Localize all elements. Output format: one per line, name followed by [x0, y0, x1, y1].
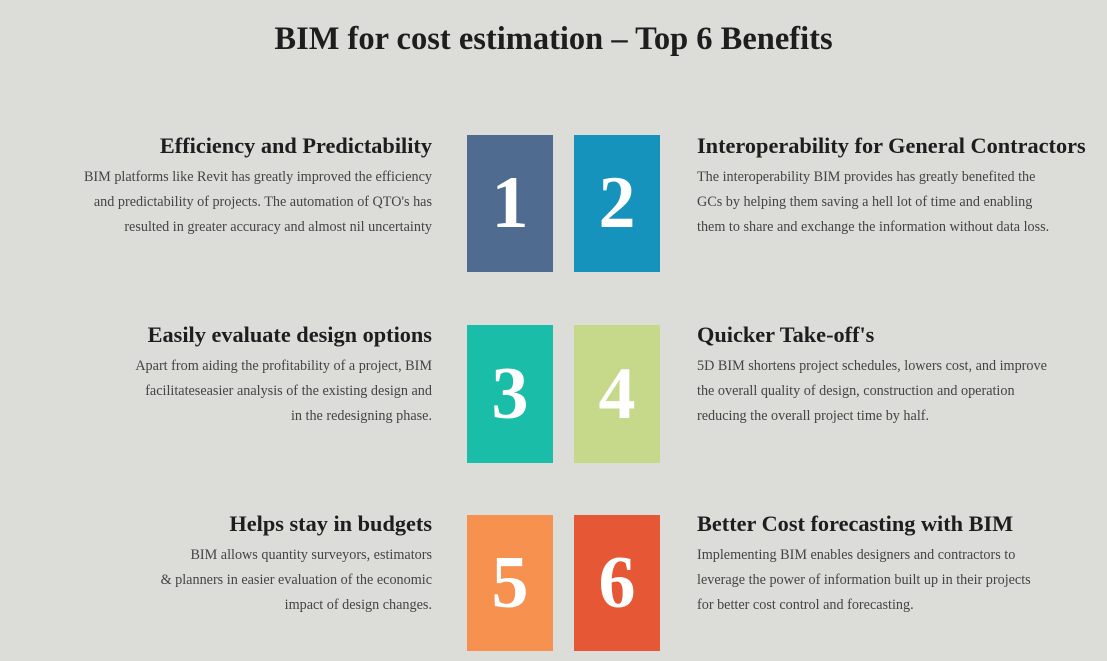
text 6: leverage the power of information built up in their projects — [697, 572, 1031, 588]
text 4: the overall quality of design, construction and operation — [697, 383, 1015, 399]
box 1: 1 — [492, 162, 528, 244]
box 4 — [574, 325, 660, 463]
text 2: Interoperability for General Contractors — [697, 133, 1086, 158]
text 3 — [135, 322, 432, 424]
text 1: and predictability of projects. The automation of QTO's has — [94, 194, 432, 210]
text 2 — [697, 133, 1086, 235]
title: BIM for cost estimation – Top 6 Benefits — [274, 21, 833, 57]
text 6: for better cost control and forecasting. — [697, 597, 914, 613]
text 1: resulted in greater accuracy and almost nil uncertainty — [124, 219, 432, 235]
box 2 — [574, 135, 660, 272]
text 3: Apart from aiding the profitability of a project, BIM — [135, 358, 432, 374]
text 5: Helps stay in budgets — [229, 511, 432, 536]
text 1: Efficiency and Predictability — [160, 133, 432, 158]
text 5: impact of design changes. — [285, 597, 432, 613]
text 6: Implementing BIM enables designers and contractors to — [697, 547, 1015, 563]
box 5: 5 — [492, 542, 528, 624]
text 2: them to share and exchange the information without data loss. — [697, 219, 1049, 235]
box 1 — [467, 135, 553, 272]
box 6 — [574, 515, 660, 651]
text 6: Better Cost forecasting with BIM — [697, 511, 1013, 536]
text 3: in the redesigning phase. — [291, 408, 432, 424]
box 3 — [467, 325, 553, 463]
text 2: The interoperability BIM provides has greatly benefited the — [697, 169, 1035, 185]
text 4: 5D BIM shortens project schedules, lowers cost, and improve — [697, 358, 1047, 374]
text 5 — [161, 511, 432, 613]
text 6 — [697, 511, 1031, 613]
text 5: BIM allows quantity surveyors, estimators — [190, 547, 432, 563]
box 5 — [467, 515, 553, 651]
box 4: 4 — [598, 352, 636, 434]
text 4: reducing the overall project time by half. — [697, 408, 929, 424]
text 3: facilitateseasier analysis of the existing design and — [145, 383, 432, 399]
text 1: BIM platforms like Revit has greatly improved the efficiency — [84, 169, 432, 185]
text 4 — [697, 322, 1047, 424]
box 2: 2 — [598, 162, 636, 244]
box 3: 3 — [492, 352, 528, 434]
text 3: Easily evaluate design options — [148, 322, 432, 347]
text 4: Quicker Take-off's — [697, 322, 874, 347]
text 1 — [84, 133, 432, 235]
text 2: GCs by helping them saving a hell lot of time and enabling — [697, 194, 1032, 210]
box 6: 6 — [598, 542, 636, 624]
text 5: & planners in easier evaluation of the economic — [161, 572, 432, 588]
